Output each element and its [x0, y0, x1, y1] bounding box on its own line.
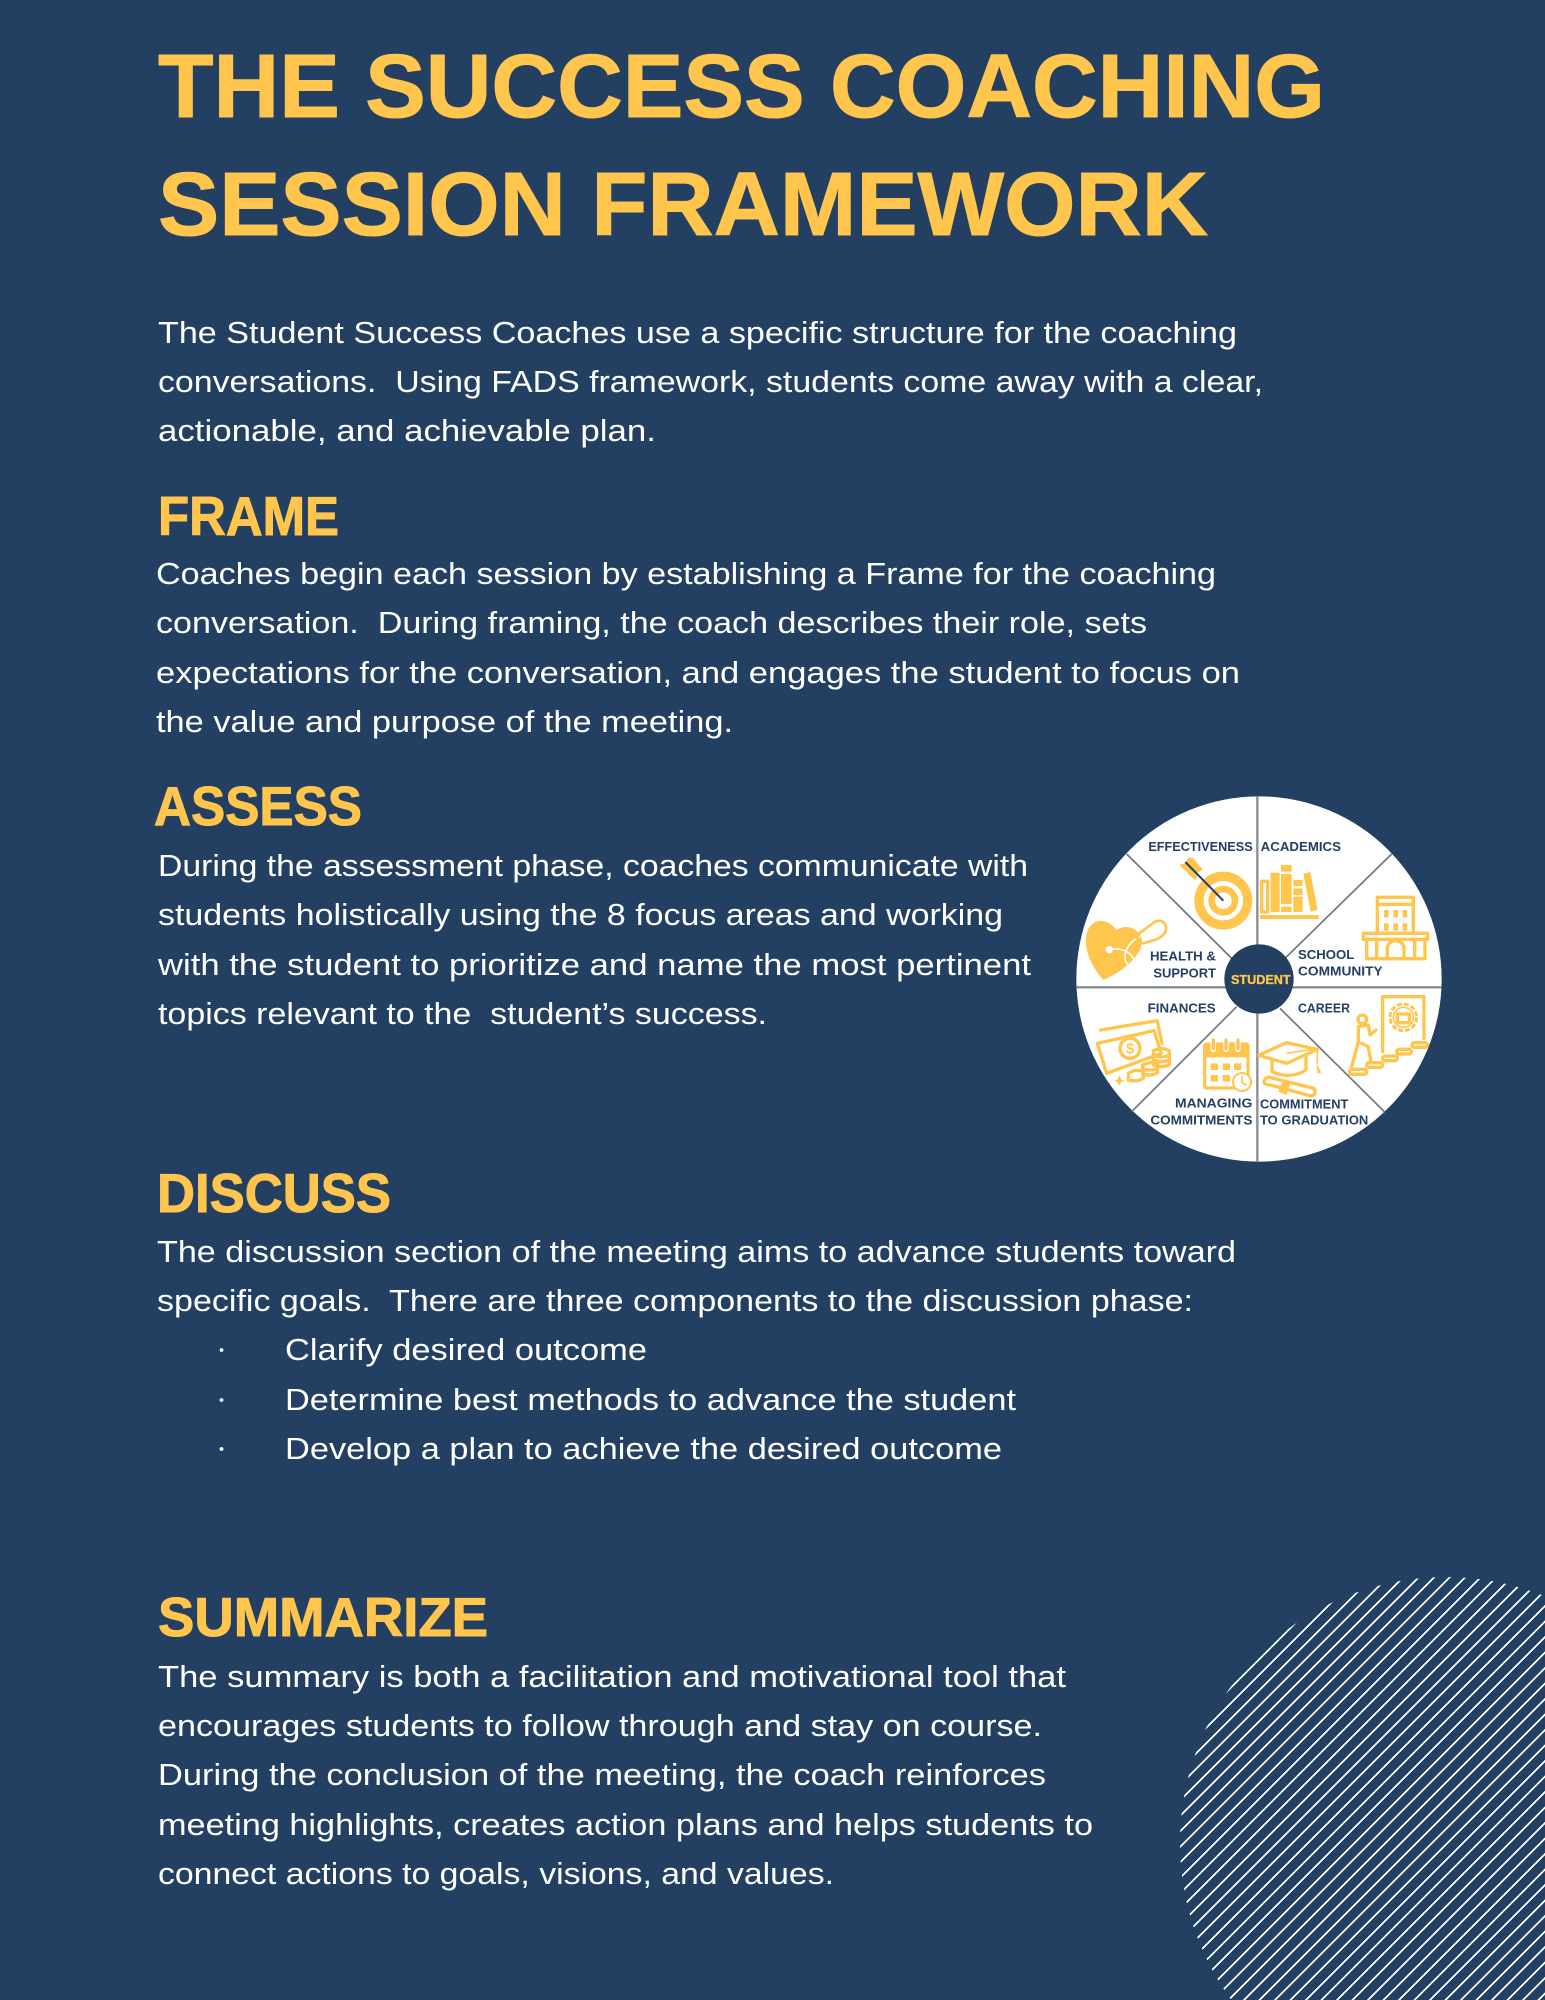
segment: health and support: SUPPORT — [1153, 965, 1216, 980]
heading: frame: FRAME — [158, 485, 339, 547]
heading: assess: ASSESS — [154, 775, 362, 837]
wheel hub: student: STUDENT — [1231, 972, 1291, 987]
intro text block: conversations. Using FADS framework, students come away with a clear, — [158, 365, 1263, 399]
text block: frame: the value and purpose of the meeting. — [156, 705, 733, 739]
segment: school community — [1298, 897, 1428, 979]
text block: frame: conversation. During framing, the coach describes their role, sets — [156, 606, 1147, 640]
text block: assess: During the assessment phase, coaches communicate with — [158, 849, 1028, 883]
wheel hub: student — [1224, 944, 1294, 1014]
segment: health and support — [1086, 921, 1216, 980]
intro text block: The Student Success Coaches use a specific structure for the coaching — [158, 316, 1237, 350]
text block: discuss: The discussion section of the meeting aims to advance students toward — [157, 1235, 1236, 1269]
segment: academics: ACADEMICS — [1261, 839, 1341, 854]
text block: summarize: meeting highlights, creates action plans and helps students to — [158, 1808, 1093, 1842]
bullet list: discussion components: Determine best methods to advance the student — [285, 1383, 1017, 1417]
segment: academics — [1260, 839, 1341, 919]
text block: summarize: connect actions to goals, visions, and values. — [158, 1857, 834, 1891]
title: THE SUCCESS COACHING — [158, 37, 1325, 137]
segment: commitment to graduation: TO GRADUATION — [1260, 1113, 1368, 1128]
segment: finances: $ — [1126, 1042, 1134, 1058]
heading: discuss: DISCUSS — [157, 1162, 391, 1224]
segment: managing commitments: MANAGING — [1175, 1095, 1252, 1110]
text block: summarize: encourages students to follow through and stay on course. — [158, 1709, 1042, 1743]
text block: frame: Coaches begin each session by establishing a Frame for the coaching — [156, 557, 1216, 591]
segment: career — [1298, 997, 1427, 1074]
bullet list: discussion components: Clarify desired outcome — [285, 1333, 647, 1367]
segment: commitment to graduation — [1259, 1043, 1368, 1128]
intro text block — [158, 316, 1263, 448]
segment: managing commitments: COMMITMENTS — [1150, 1113, 1253, 1128]
bullet list: discussion components: Develop a plan to achieve the desired outcome — [285, 1432, 1002, 1466]
decorative striped circle — [1180, 1577, 1545, 2000]
text block: summarize: During the conclusion of the meeting, the coach reinforces — [158, 1758, 1046, 1792]
text block: frame — [156, 557, 1240, 739]
intro text block: actionable, and achievable plan. — [158, 414, 656, 448]
text block: discuss — [157, 1235, 1236, 1318]
segment: commitment to graduation: COMMITMENT — [1260, 1097, 1348, 1112]
segment: finances — [1097, 1000, 1216, 1085]
heading: summarize: SUMMARIZE — [158, 1586, 488, 1648]
wheel: 8 focus areas — [1076, 796, 1442, 1162]
segment: school community: COMMUNITY — [1298, 964, 1383, 979]
segment: effectiveness: EFFECTIVENESS — [1148, 839, 1253, 854]
segment: finances: FINANCES — [1148, 1000, 1216, 1015]
segment: health and support: HEALTH & — [1150, 948, 1216, 963]
segment: effectiveness — [1148, 839, 1253, 925]
title: SESSION FRAMEWORK — [158, 155, 1208, 255]
text block: assess: students holistically using the 8 focus areas and working — [158, 898, 1003, 932]
bullet list: discussion components — [220, 1333, 1017, 1466]
text block: assess: topics relevant to the student’s success. — [158, 997, 767, 1031]
text block: frame: expectations for the conversation, and engages the student to focus on — [156, 656, 1240, 690]
text block: assess — [157, 849, 1032, 1031]
text block: summarize: The summary is both a facilitation and motivational tool that — [158, 1660, 1067, 1694]
title — [158, 37, 1325, 255]
segment: career: CAREER — [1298, 1000, 1351, 1015]
text block: discuss: specific goals. There are three components to the discussion phase: — [157, 1284, 1193, 1318]
segment: managing commitments — [1150, 1039, 1253, 1128]
text block: summarize — [158, 1660, 1093, 1891]
segment: school community: SCHOOL — [1298, 947, 1354, 962]
text block: assess: with the student to prioritize and name the most pertinent — [157, 948, 1032, 982]
